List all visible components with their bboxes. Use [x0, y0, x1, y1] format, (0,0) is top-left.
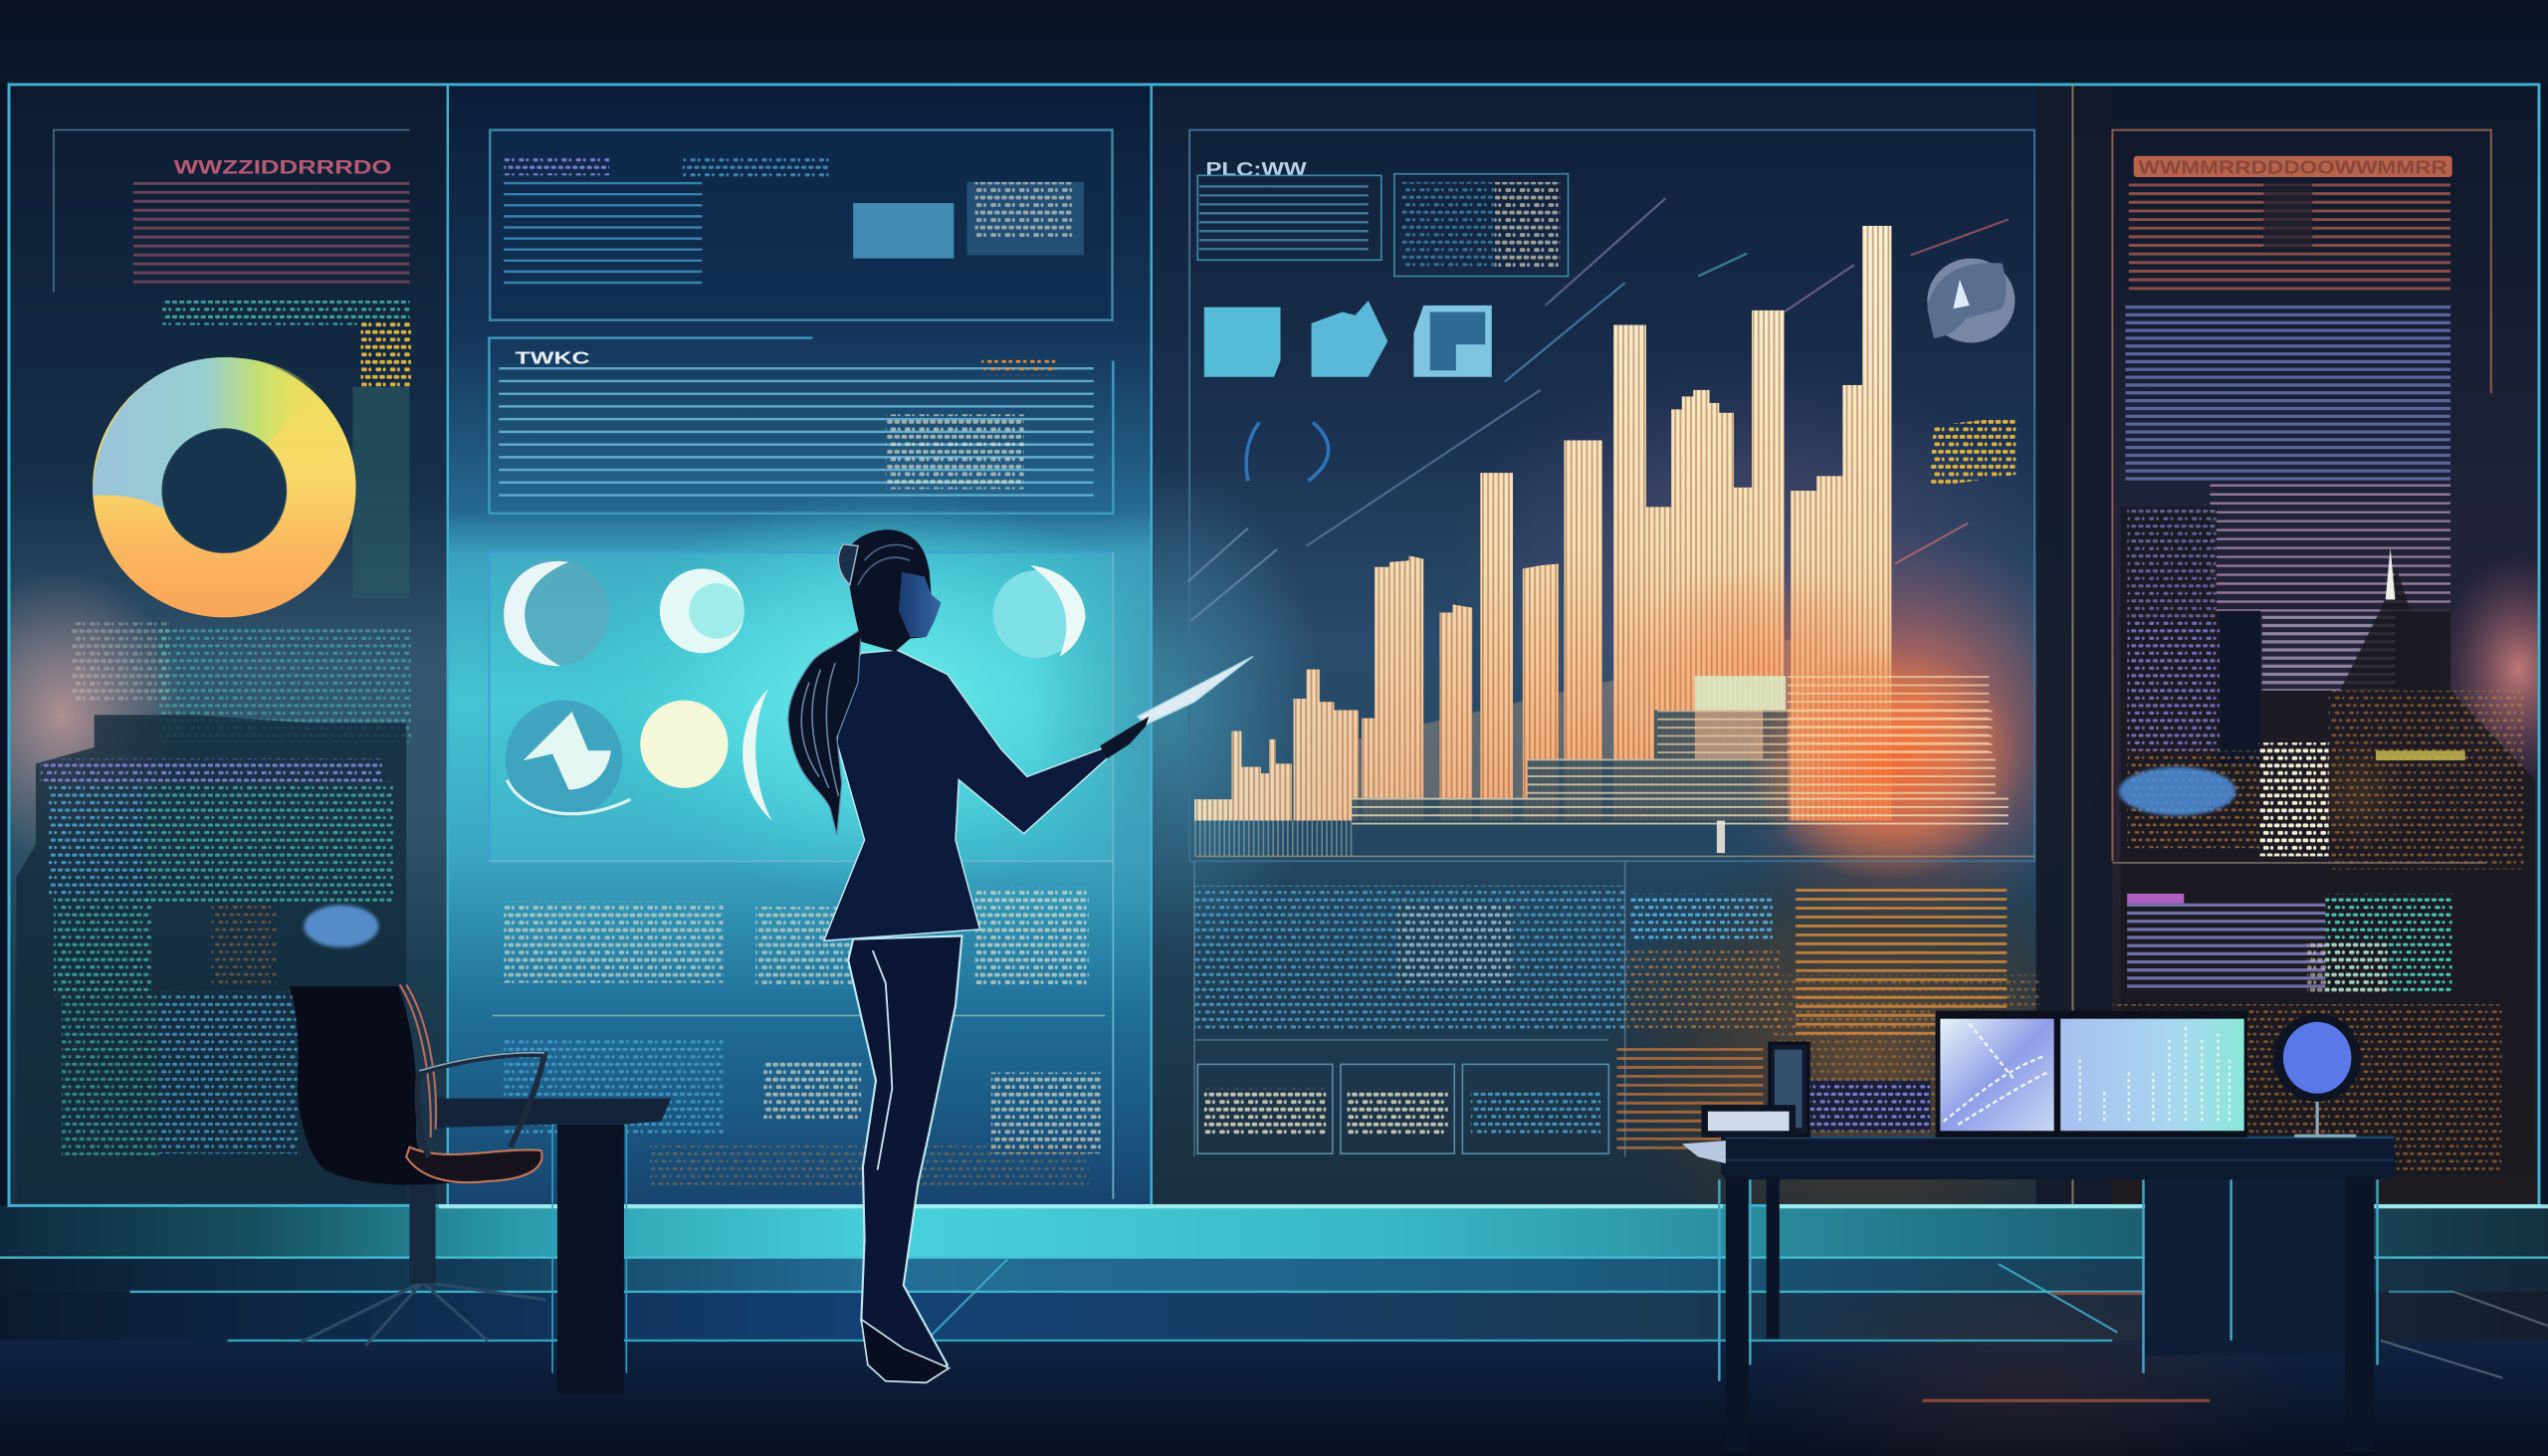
chair column	[409, 1183, 436, 1284]
hand	[1100, 717, 1149, 758]
right panel heading text: WWMMRRDDDOOWWMMRR	[2139, 157, 2447, 178]
panel: main bar chart board	[1187, 130, 2039, 1178]
lower left data lines	[41, 758, 393, 1155]
window frame	[9, 85, 2548, 1206]
desk monitors	[1935, 1010, 2247, 1138]
tablet	[1138, 657, 1253, 725]
parenthesis marks	[1246, 422, 1329, 481]
spire light	[2386, 547, 2396, 599]
low bars behind chart	[1357, 617, 1885, 820]
donut chart	[93, 357, 356, 617]
cream circle	[640, 701, 728, 788]
lower data grids, blue	[1194, 861, 1780, 1156]
white data block	[2258, 742, 2329, 856]
lower data grids, orange	[1836, 889, 1966, 1040]
chair arm highlight	[419, 1053, 544, 1071]
panel: left report with donut	[16, 130, 411, 1202]
trousers and legs	[848, 936, 962, 1381]
yellow note	[1929, 416, 2017, 488]
circle chart three	[993, 565, 1086, 658]
chair back	[290, 986, 471, 1184]
icon tile one	[1204, 308, 1281, 377]
left upper data lines	[72, 622, 411, 742]
shoe	[861, 1320, 949, 1382]
hair streaks	[858, 545, 914, 585]
chart overlay colouring	[1194, 226, 1909, 820]
face	[899, 572, 941, 637]
circle chart one	[503, 559, 609, 666]
hair bun	[838, 544, 858, 585]
hair strands	[801, 663, 838, 796]
side column	[352, 387, 409, 598]
circle chart two	[660, 568, 744, 653]
icon tile three	[1413, 306, 1492, 377]
left panel text lines	[187, 182, 356, 290]
chair side ribs	[400, 984, 436, 1138]
chair arm	[417, 1054, 544, 1156]
panel: right report	[2112, 130, 2535, 1178]
left city silhouette	[16, 715, 406, 1202]
panel: centre text and circles	[489, 130, 1113, 1199]
right screen	[2060, 1019, 2244, 1131]
floor bands	[0, 1205, 2548, 1456]
leg highlight	[873, 950, 892, 1169]
chair base	[301, 1282, 546, 1346]
red text lines	[2191, 183, 2388, 291]
bar chart	[1194, 226, 1891, 820]
violet text lines	[2189, 306, 2388, 485]
blue smear	[2119, 767, 2236, 816]
mint data block	[1695, 676, 1786, 710]
top report card	[490, 130, 1113, 320]
circle chart four	[506, 701, 630, 817]
pink text lines	[2256, 485, 2404, 616]
chair seat	[406, 1147, 542, 1182]
chart base steps	[1194, 647, 2034, 881]
side table	[437, 1099, 671, 1394]
right lower data lines	[2112, 863, 2502, 1174]
second report card	[489, 338, 1113, 514]
icon tile two	[1312, 301, 1387, 377]
chart board heading: PLC:WW	[1205, 158, 1307, 180]
office chair	[290, 984, 546, 1346]
woman presenting	[788, 529, 1253, 1382]
glowing circles card	[489, 552, 1113, 861]
head	[848, 529, 941, 652]
blue cloud note	[304, 905, 378, 947]
desk round clock	[2273, 1014, 2361, 1136]
orb icon	[1927, 259, 2015, 342]
lower data grids	[489, 552, 1113, 1199]
desk	[1719, 1138, 2397, 1453]
upper wall band	[0, 0, 2548, 85]
lower small tiles	[1197, 975, 2039, 1178]
sky streaks	[1187, 198, 2009, 621]
small data card one	[1197, 175, 1381, 260]
crescent	[743, 689, 772, 820]
left screen	[1940, 1019, 2054, 1131]
second report card: TWKC	[516, 348, 590, 368]
desk gadgets	[1682, 1043, 1931, 1163]
ponytail	[788, 629, 861, 835]
city speckles	[2119, 507, 2523, 869]
green text block	[162, 301, 409, 325]
mid text lines	[2288, 616, 2370, 691]
dark gap in red lines	[2263, 183, 2312, 249]
right city silhouette	[2121, 507, 2535, 1178]
right panel heading	[2134, 156, 2452, 177]
left panel heading: WWZZIDDRRRDO	[174, 157, 391, 179]
yellow side block	[360, 321, 411, 387]
small data card two	[1394, 174, 1569, 277]
jacket	[824, 650, 1107, 940]
